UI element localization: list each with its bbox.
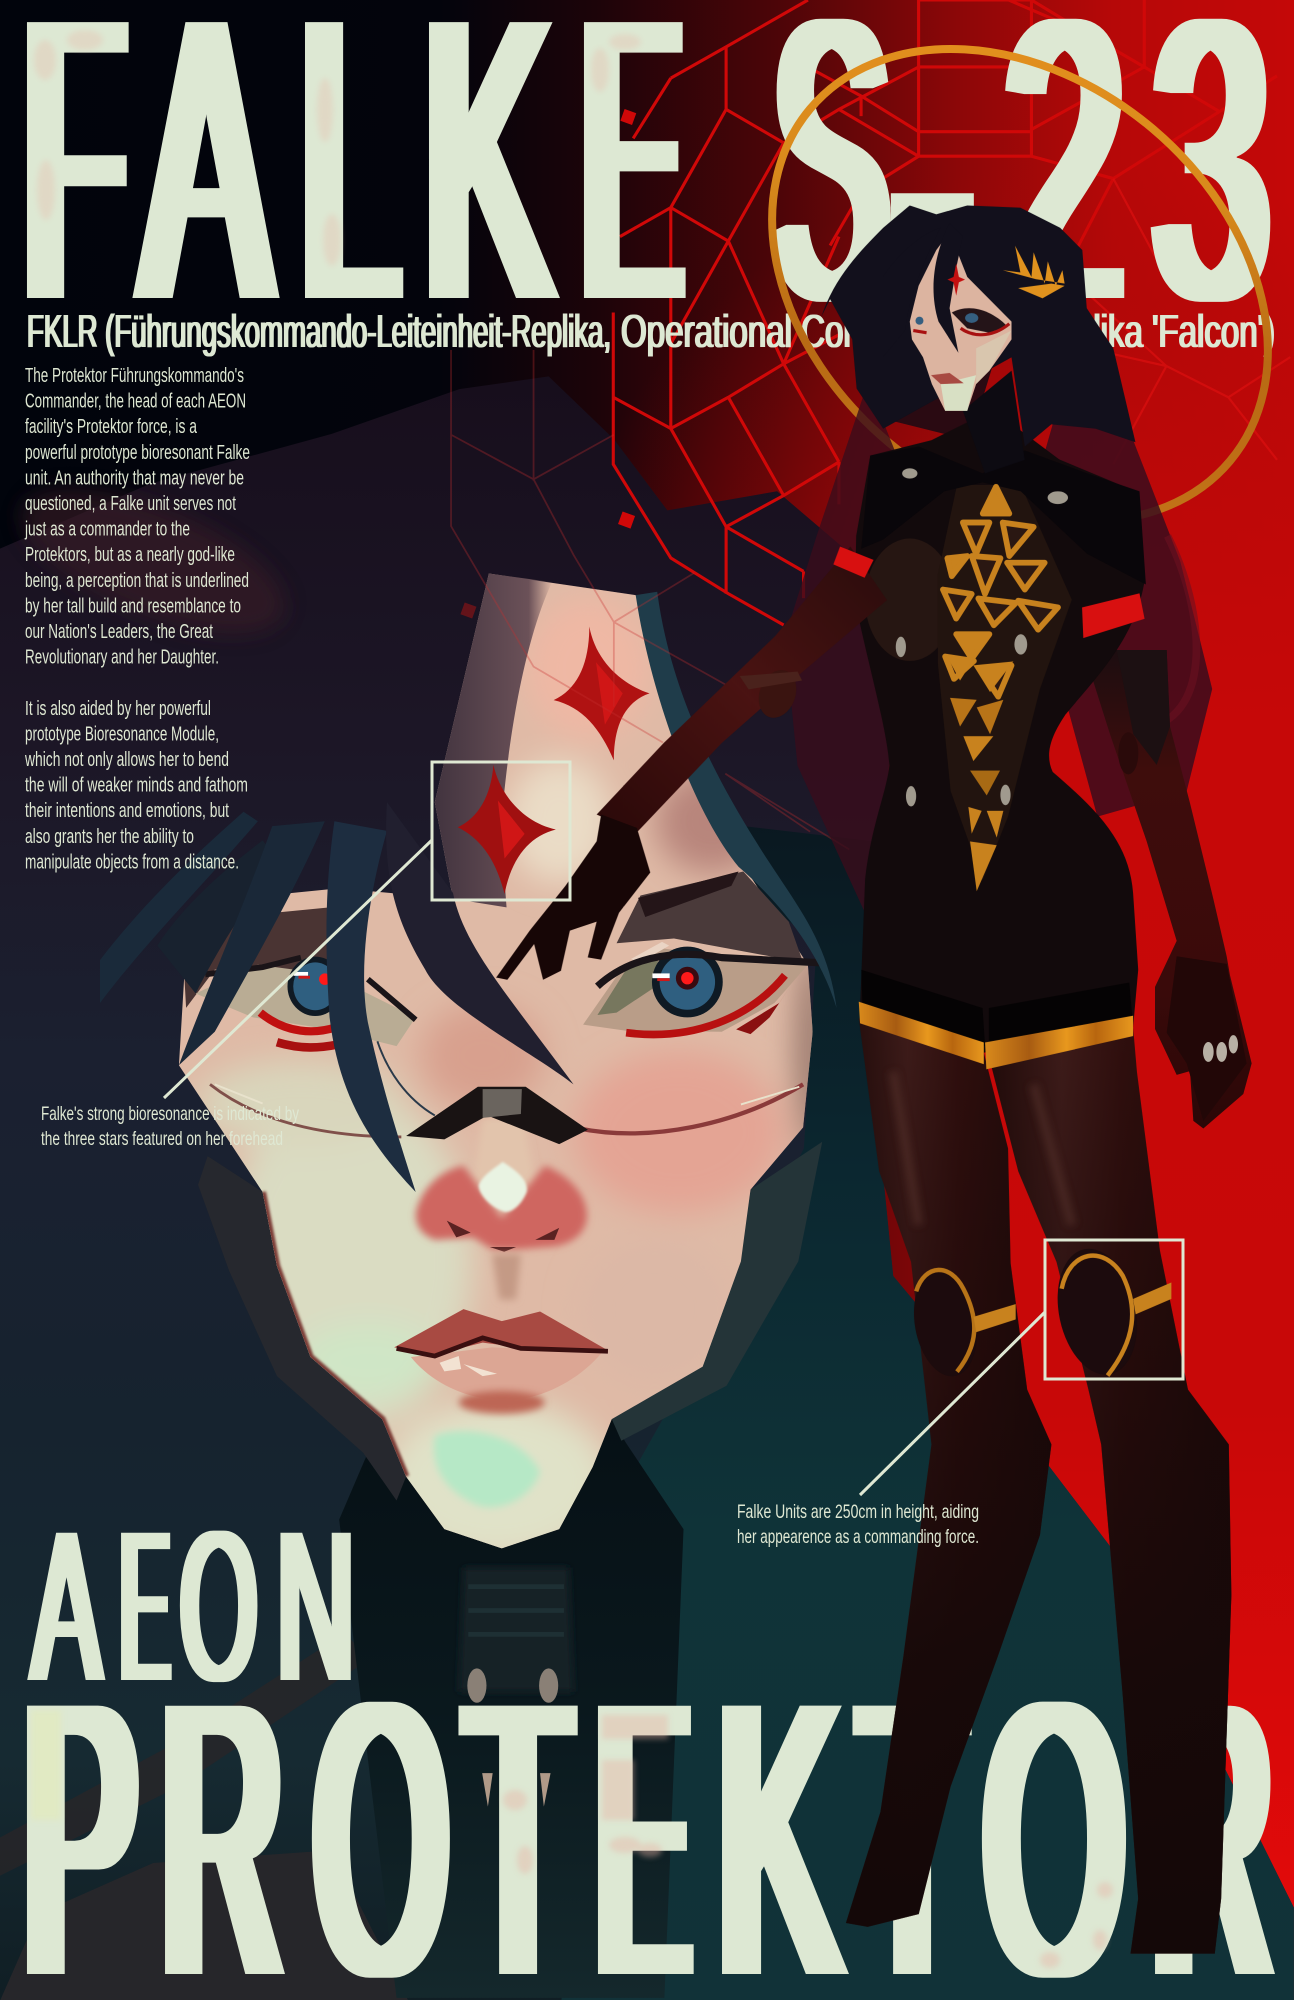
body text: which not only allows her to bend: [24, 748, 229, 771]
callout line: knee pad: [860, 1312, 1045, 1495]
callout text: forehead star: Falke's strong bioresonance is indicated by: [41, 1103, 299, 1125]
neck and collar: [198, 1142, 822, 1998]
nose: [416, 1118, 587, 1300]
shorts hem bands: [859, 1002, 1133, 1069]
body text: It is also aided by her powerful: [25, 697, 211, 720]
body text: their intentions and emotions, but: [25, 799, 229, 822]
paint splatter on PROTEKTOR: [31, 1710, 1187, 1968]
callout box: forehead star: [432, 762, 570, 900]
subtitle: FKLR (Führungskommando-Leiteinheit-Replika,: [27, 305, 611, 357]
head and hair: [821, 205, 1135, 473]
body text: prototype Bioresonance Module,: [25, 722, 219, 745]
gold triangle panel lower: [947, 656, 1013, 891]
tiny diamond: [460, 602, 476, 618]
upper forehead stars: [451, 350, 849, 894]
body text: just as a commander to the: [24, 518, 190, 541]
body text: facility's Protektor force, is a: [25, 415, 197, 438]
mouth: [931, 373, 964, 384]
right arm: [1083, 650, 1252, 1128]
body text: [24, 364, 250, 873]
standing figure: [496, 205, 1252, 1954]
forehead shadow: [435, 574, 552, 907]
callout text: forehead star: [41, 1103, 299, 1150]
paint splatter on title: [34, 30, 641, 266]
eyes and makeup: [952, 308, 1007, 333]
heading: AEON: N: [277, 1487, 355, 1725]
star on upper forehead: [554, 627, 650, 760]
laurel ornament: [1003, 246, 1065, 298]
right eye: [583, 872, 822, 1034]
body text: Protektors, but as a nearly god-like: [25, 543, 235, 566]
arm reaching to the big face: [496, 547, 887, 980]
heading: AEON: O: [180, 1487, 257, 1726]
body text: questioned, a Falke unit serves not: [25, 492, 236, 515]
neck: [963, 371, 1025, 473]
body text: The Protektor Führungskommando's: [25, 364, 244, 387]
body text: unit. An authority that may never be: [25, 466, 244, 489]
red hexagonal web: [613, 0, 1290, 625]
body text: our Nation's Leaders, the Great: [25, 620, 213, 643]
body text: Revolutionary and her Daughter.: [25, 646, 219, 669]
legs: [846, 1018, 1231, 1954]
red arm band: [833, 547, 874, 578]
heading: AEON: E: [120, 1486, 170, 1725]
hair over face: [883, 223, 963, 357]
body text: by her tall build and resemblance to: [25, 594, 241, 617]
body text: manipulate objects from a distance.: [25, 850, 239, 873]
big portrait face: [100, 553, 841, 1998]
callout text: forehead star: the three stars featured on her forehead: [41, 1128, 283, 1150]
callout box: knee pad: [1045, 1240, 1183, 1379]
heading: PROTEKTOR: [24, 1621, 1272, 2000]
halo ring: [678, 0, 1294, 618]
body text: the will of weaker minds and fathom: [25, 774, 248, 797]
body text: powerful prototype bioresonant Falke: [25, 441, 250, 464]
heading: AEON: A: [32, 1486, 101, 1726]
callout text: knee pad: Falke Units are 250cm in height, aiding: [737, 1501, 979, 1523]
hair mass: [821, 205, 1135, 447]
armored studs: [896, 468, 1068, 806]
callout line: forehead star: [164, 840, 432, 1098]
face skin: [910, 232, 1012, 411]
torso: [855, 421, 1146, 1053]
left eye: [181, 907, 416, 1047]
body text: being, a perception that is underlined: [25, 569, 249, 592]
heading: AEON: [32, 1486, 355, 1726]
faint web over hood and face: [451, 350, 849, 850]
callout text: knee pad: [737, 1501, 979, 1548]
star on lower forehead: [458, 765, 556, 894]
skin: [179, 574, 813, 1548]
title: FALKE S-23: [25, 0, 1268, 391]
visor: [210, 1084, 803, 1144]
gold triangle panel: [943, 487, 1058, 697]
star mark: [947, 263, 965, 296]
body text: also grants her the ability to: [25, 825, 194, 848]
body text: Commander, the head of each AEON: [25, 390, 246, 413]
back hair: [785, 313, 1212, 919]
knee pads: [906, 1241, 1171, 1382]
hair strands over the face: [100, 592, 837, 1192]
callout text: knee pad: her appearence as a commanding force.: [737, 1526, 979, 1548]
lips: [394, 1309, 608, 1414]
red arm band right: [1082, 593, 1145, 638]
